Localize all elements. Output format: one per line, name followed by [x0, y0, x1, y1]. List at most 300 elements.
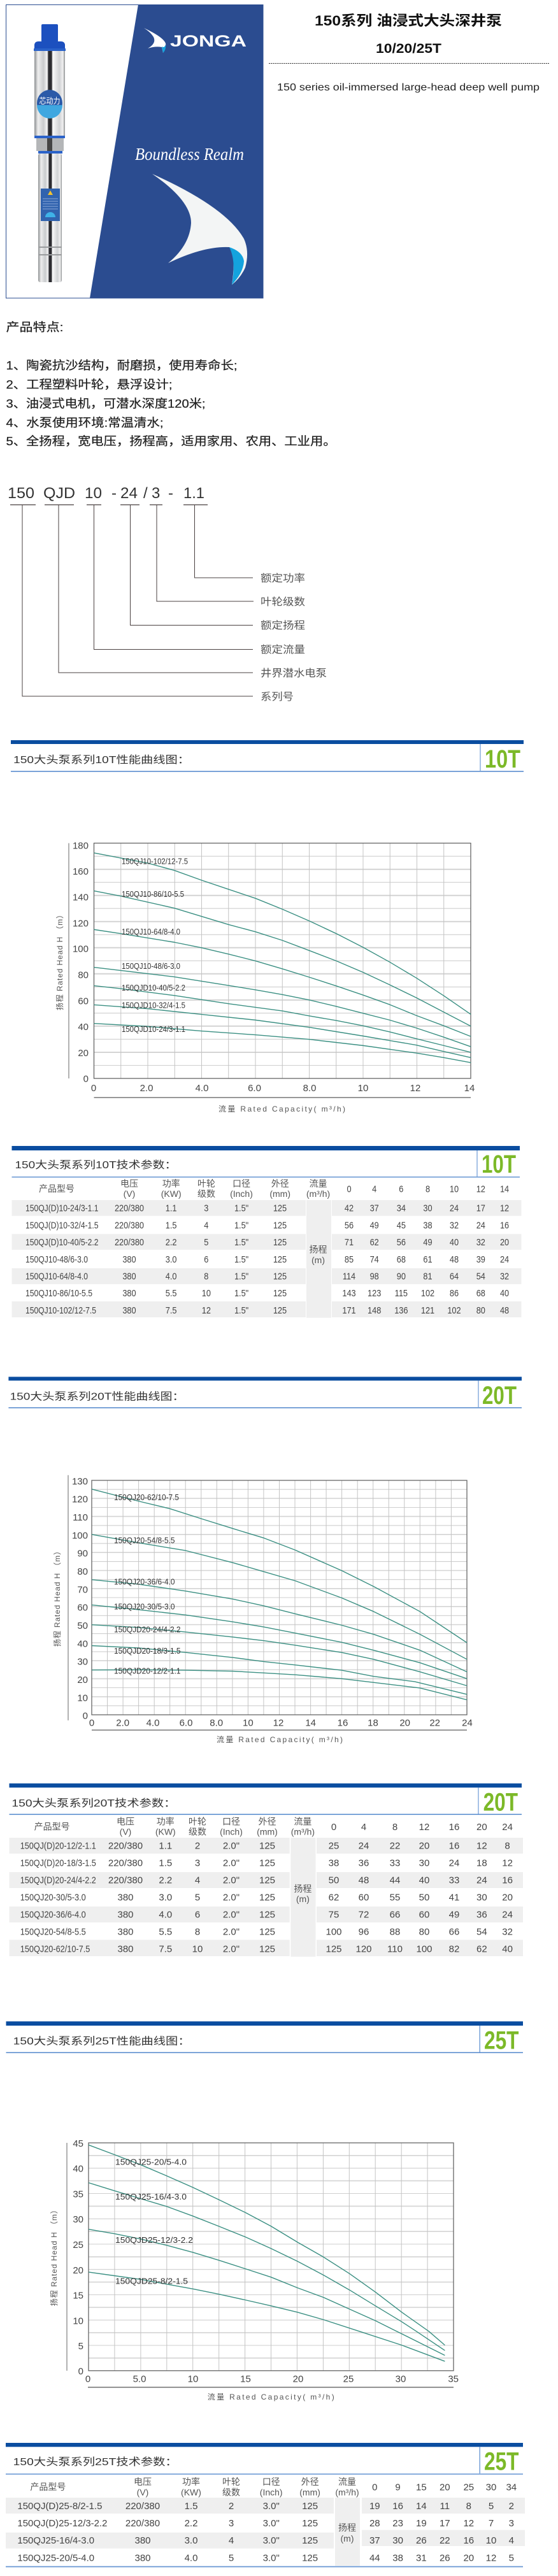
table values: 8 [426, 1183, 430, 1194]
table values: 2.2 [159, 1875, 172, 1885]
table header: 产品型号 [30, 2482, 66, 2492]
table values: 30 [486, 2482, 496, 2493]
table values: 380 [117, 1926, 134, 1938]
table header: 电压 [117, 1817, 134, 1827]
curve labels: 150QJD10-32/4-1.5 [122, 1001, 185, 1010]
panel: product banner [6, 4, 263, 298]
table values: 14 [416, 2501, 427, 2512]
table values: 72 [359, 1910, 369, 1920]
table values: 16 [463, 2535, 474, 2546]
chart: 10T performance curves [55, 841, 475, 1113]
model code: 150 [8, 485, 34, 502]
text block: product features: 产品特点: [6, 320, 64, 334]
chart: 25T performance curves [49, 2138, 459, 2401]
curve labels: 150QJ10-64/8-4.0 [122, 927, 180, 936]
table values: 15 [416, 2482, 427, 2493]
table values: 125 [273, 1305, 287, 1315]
table header: 外径 [301, 2477, 319, 2487]
table values: 80 [419, 1926, 429, 1938]
table values: 12 [463, 2518, 474, 2529]
section header: 20T curve: 20T [482, 1382, 517, 1410]
section header: 10T curve: 10T [485, 745, 520, 773]
x axis labels: 4.0 [147, 1717, 159, 1729]
table header: 扬程 [310, 1245, 327, 1255]
table values: 24 [476, 1875, 487, 1885]
table values: 30 [419, 1857, 429, 1869]
table values: 28 [369, 2518, 380, 2529]
y axis labels: 50 [77, 1621, 88, 1631]
chart: 20T performance curves [52, 1475, 473, 1744]
table values: 24 [502, 1822, 513, 1833]
table values: 66 [449, 1926, 459, 1938]
table values: 0 [347, 1183, 352, 1194]
table values: 102 [447, 1305, 461, 1315]
slogan: Boundless Realm [135, 145, 244, 164]
table values: 2.0" [223, 1892, 240, 1903]
y axis labels: 0 [78, 2366, 83, 2377]
table values: 60 [419, 1910, 429, 1920]
model names: 150QJ(D)25-12/3-2.2 [17, 2518, 107, 2529]
y axis labels: 45 [73, 2138, 83, 2149]
table values: 220/380 [115, 1202, 144, 1213]
table values: 56 [345, 1219, 354, 1231]
table values: 96 [359, 1926, 369, 1938]
table header: (m³/h) [335, 2487, 359, 2497]
model names: 150QJ10-48/6-3.0 [25, 1254, 88, 1265]
table values: 1.5 [166, 1219, 177, 1231]
table values: 45 [397, 1219, 406, 1231]
table values: 88 [390, 1926, 400, 1938]
table values: 20 [463, 2553, 474, 2563]
table values: 5 [489, 2501, 494, 2512]
logo: JONGA: JONGA [170, 32, 247, 50]
text block: product features: 3、油浸式电机，可潜水深度120米; [6, 397, 205, 410]
y axis labels: 120 [72, 1494, 88, 1505]
table values: 102 [421, 1287, 434, 1298]
table values: 1.5" [234, 1236, 248, 1247]
y axis labels: 40 [77, 1638, 88, 1649]
model names: 150QJ(D)10-24/3-1.1 [25, 1203, 98, 1214]
table values: 380 [117, 1892, 134, 1903]
table values: 41 [449, 1892, 459, 1903]
model code: QJD [43, 485, 75, 502]
x axis labels: 2.0 [140, 1083, 153, 1094]
table header: (Inch) [220, 1827, 243, 1837]
model code: 1.1 [183, 485, 204, 502]
table values: 380 [117, 1910, 134, 1920]
legend labels: 系列号 [261, 691, 294, 703]
table values: 3.0 [159, 1892, 172, 1903]
table values: 7 [489, 2518, 494, 2529]
table values: 68 [397, 1254, 406, 1264]
y axis labels: 80 [78, 970, 89, 981]
table values [115, 1183, 509, 1315]
table values: 10 [192, 1944, 203, 1954]
table header: (m³/h) [291, 1827, 315, 1837]
table values: 380 [134, 2535, 151, 2546]
table header: (KW) [181, 2487, 201, 2497]
section header: 10T parameters: 10T [482, 1150, 516, 1178]
table values: 16 [449, 1822, 459, 1833]
y axis labels: 140 [73, 892, 89, 903]
table values: 5.5 [166, 1287, 177, 1298]
model code: 3 [152, 485, 160, 502]
table header: 口径 [222, 1817, 240, 1827]
curve labels: 150QJD10-40/5-2.2 [122, 984, 185, 992]
table values: 32 [502, 1926, 513, 1938]
table values: 20 [476, 1822, 487, 1833]
table values: 11 [440, 2501, 450, 2512]
table values: 50 [329, 1875, 339, 1885]
table values: 4.0 [166, 1270, 177, 1282]
table values: 20 [440, 2482, 450, 2493]
table values: 125 [273, 1254, 287, 1264]
table values: 17 [440, 2518, 450, 2529]
text block: product features: 4、水泵使用环境:常温清水; [6, 416, 163, 429]
section header: 10T parameters [11, 1146, 520, 1178]
table header: 级数 [189, 1827, 206, 1837]
icon: submersible pump [34, 24, 66, 282]
table values: 2 [509, 2501, 514, 2512]
table header: 电压 [134, 2477, 152, 2487]
table values: 22 [390, 1841, 400, 1851]
table values: 24 [502, 1910, 513, 1920]
y axis labels: 80 [77, 1566, 88, 1577]
table values: 25 [463, 2482, 474, 2493]
y axis labels: 0 [83, 1711, 88, 1722]
x axis labels: 0 [89, 1717, 94, 1729]
table header: 级数 [222, 2487, 240, 2497]
table values: 125 [259, 1857, 275, 1869]
table values: 125 [302, 2535, 318, 2546]
section header: 25T parameters: 25T [484, 2447, 519, 2475]
table header: 口径 [232, 1178, 250, 1189]
table values: 220/380 [115, 1219, 144, 1231]
title: 150系列 油浸式大头深井泵 [315, 13, 502, 29]
x axis labels: 24 [462, 1717, 473, 1729]
section header: 25T curve: 25T [484, 2027, 519, 2055]
table values: 380 [122, 1254, 136, 1264]
table header: 外径 [271, 1178, 289, 1189]
model names: 150QJ25-20/5-4.0 [17, 2553, 94, 2563]
table values: 19 [369, 2501, 380, 2512]
legend labels: 额定功率 [261, 573, 305, 584]
table values: 30 [476, 1892, 487, 1903]
table values: 12 [476, 1841, 487, 1851]
x axis title: 流量 Rated Capacity( m³/h) [208, 2393, 334, 2401]
table header: 功率 [162, 1178, 180, 1189]
y axis labels: 110 [73, 1512, 88, 1523]
table values: 125 [259, 1875, 275, 1885]
curve labels: 150QJD25-8/2-1.5 [115, 2277, 188, 2286]
y axis labels: 30 [73, 2214, 83, 2225]
table header: (m) [311, 1255, 325, 1265]
model names: 150QJ25-16/4-3.0 [17, 2535, 94, 2546]
x axis labels: 8.0 [210, 1717, 223, 1729]
legend labels: 额定流量 [261, 644, 305, 655]
table values: 8 [204, 1270, 209, 1282]
table values: 86 [450, 1287, 459, 1298]
table values: 36 [476, 1910, 487, 1920]
table values: 1.5" [234, 1270, 248, 1282]
table values: 20 [500, 1236, 509, 1247]
table values: 9 [395, 2482, 401, 2493]
table header: 产品型号 [39, 1184, 75, 1194]
table header: 外径 [259, 1817, 276, 1827]
y axis labels: 70 [77, 1584, 88, 1595]
table values: 220/380 [125, 2518, 160, 2529]
table values: 68 [476, 1287, 485, 1298]
x axis labels: 0 [85, 2373, 90, 2385]
table values: 66 [390, 1910, 400, 1920]
model names [20, 1841, 96, 1954]
table values: 55 [390, 1892, 400, 1903]
x axis labels: 25 [343, 2373, 354, 2385]
table values: 12 [486, 2553, 496, 2563]
model names: 150QJ(D)10-32/4-1.5 [25, 1220, 98, 1231]
table values: 4 [372, 1183, 376, 1194]
table values: 4 [229, 2535, 234, 2546]
y axis labels [72, 1476, 88, 1722]
curve labels: 150QJ25-20/5-4.0 [115, 2158, 187, 2167]
table values: 82 [449, 1944, 459, 1954]
x axis labels: 0 [91, 1083, 96, 1094]
table values: 1.1 [166, 1202, 177, 1213]
table values: 380 [122, 1305, 136, 1315]
curve labels: 150QJD10-24/3-1.1 [122, 1025, 185, 1034]
table header: (KW) [155, 1827, 176, 1837]
table values: 5 [195, 1892, 200, 1903]
model names: 150QJ10-86/10-5.5 [25, 1288, 92, 1299]
x axis labels: 2.0 [116, 1717, 129, 1729]
x axis labels: 6.0 [180, 1717, 192, 1729]
curve labels: 150QJ10-102/12-7.5 [122, 857, 188, 866]
table values: 1.5" [234, 1219, 248, 1231]
table values: 4 [361, 1822, 366, 1833]
section header: 20T curve [8, 1377, 522, 1410]
table header: (V) [120, 1827, 131, 1837]
curve labels: 150QJD20-24/4-2.2 [114, 1626, 181, 1635]
curve labels: 150QJ10-86/10-5.5 [122, 890, 184, 899]
table header: 扬程 [294, 1884, 311, 1894]
table values: 16 [392, 2501, 403, 2512]
table values: 125 [259, 1841, 275, 1851]
y axis labels [73, 841, 89, 1084]
table values: 8 [392, 1822, 397, 1833]
table values: 125 [302, 2553, 318, 2563]
table values: 30 [392, 2535, 403, 2546]
table values: 31 [416, 2553, 427, 2563]
table values: 220/380 [108, 1857, 143, 1869]
table values [108, 1822, 513, 1954]
table values: 7.5 [166, 1305, 177, 1315]
table values: 71 [345, 1236, 354, 1247]
table values: 100 [326, 1926, 342, 1938]
table header: 流量 [310, 1178, 327, 1189]
table: 20T parameters [9, 1817, 523, 1957]
table values: 23 [392, 2518, 403, 2529]
section header: 10T parameters: 150大头泵系列10T技术参数： [15, 1159, 177, 1171]
table values: 6 [204, 1254, 209, 1264]
x axis labels: 22 [429, 1717, 440, 1729]
table values: 125 [273, 1287, 287, 1298]
table header: 叶轮 [222, 2477, 240, 2487]
table values: 125 [273, 1270, 287, 1282]
x axis labels: 10 [358, 1083, 368, 1094]
table values: 120 [355, 1944, 372, 1954]
y axis labels: 0 [83, 1074, 89, 1084]
table values: 4 [195, 1875, 200, 1885]
table values: 6 [195, 1910, 200, 1920]
table header: 电压 [120, 1178, 138, 1189]
table header: 产品型号 [34, 1822, 70, 1832]
table values: 98 [370, 1270, 379, 1282]
table values: 12 [419, 1822, 429, 1833]
table values: 4.0 [185, 2553, 197, 2563]
table values: 125 [259, 1944, 275, 1954]
table values: 22 [440, 2535, 450, 2546]
table values: 37 [370, 1202, 379, 1213]
y axis labels: 25 [73, 2240, 83, 2250]
table values: 10 [486, 2535, 496, 2546]
model code [8, 485, 204, 502]
y axis labels: 100 [73, 944, 89, 954]
text block: product features: 5、全扬程，宽电压，扬程高，适用家用、农用、工业用。 [6, 434, 336, 448]
table values [125, 2482, 517, 2563]
table values: 16 [500, 1219, 509, 1231]
text block: product features: 1、陶瓷抗沙结构，耐磨损，使用寿命长; [6, 359, 237, 372]
diagram: model number legend [8, 485, 327, 703]
table values: 25 [329, 1841, 339, 1851]
table values: 1.5 [159, 1857, 172, 1869]
table values: 18 [476, 1857, 487, 1869]
table values: 125 [259, 1910, 275, 1920]
table values: 24 [476, 1219, 485, 1231]
table values: 125 [302, 2501, 318, 2512]
table values: 5 [509, 2553, 514, 2563]
table values: 62 [329, 1892, 339, 1903]
table values: 54 [476, 1270, 485, 1282]
table values: 34 [397, 1202, 406, 1213]
legend labels: 额定扬程 [261, 620, 305, 631]
x axis title: 流量 Rated Capacity( m³/h) [218, 1105, 345, 1113]
table values: 24 [359, 1841, 369, 1851]
table values: 100 [416, 1944, 433, 1954]
x axis labels: 5.0 [133, 2373, 146, 2385]
table header: 叶轮 [197, 1178, 215, 1189]
table values: 30 [423, 1202, 433, 1213]
table header: 级数 [197, 1189, 215, 1199]
table values: 125 [273, 1219, 287, 1231]
table values: 3.0" [263, 2501, 280, 2512]
y axis labels: 60 [78, 996, 89, 1006]
curves [89, 2145, 445, 2361]
table values: 110 [387, 1944, 403, 1954]
model names: 150QJ(D)20-24/4-2.2 [20, 1875, 96, 1885]
table values: 123 [368, 1287, 382, 1298]
table values: 4 [204, 1219, 209, 1231]
curve labels: 150QJ20-54/8-5.5 [114, 1536, 175, 1545]
table values: 2.0" [223, 1926, 240, 1938]
table values: 40 [500, 1287, 509, 1298]
table values: 20 [502, 1892, 513, 1903]
table values: 16 [502, 1875, 513, 1885]
text block: product features [6, 320, 336, 448]
table values: 32 [500, 1270, 509, 1282]
table values: 26 [416, 2535, 427, 2546]
x axis labels: 16 [338, 1717, 348, 1729]
section header: 25T curve [6, 2021, 523, 2055]
table values: 2.2 [166, 1236, 177, 1247]
table values: 3.0 [185, 2535, 197, 2546]
table values: 4.0 [159, 1910, 172, 1920]
table values: 121 [421, 1305, 434, 1315]
y axis labels: 120 [73, 919, 89, 929]
table values: 2.0" [223, 1910, 240, 1920]
table values: 49 [449, 1910, 459, 1920]
section header: 20T parameters: 20T [483, 1789, 518, 1817]
table values: 380 [122, 1270, 136, 1282]
table values: 3 [204, 1202, 209, 1213]
table values: 380 [122, 1287, 136, 1298]
x axis labels: 20 [399, 1717, 410, 1729]
table values: 125 [302, 2518, 318, 2529]
table values: 2.0" [223, 1841, 240, 1851]
table: 25T parameters [6, 2477, 525, 2567]
table values: 62 [370, 1236, 379, 1247]
y axis labels: 20 [73, 2265, 83, 2276]
table values: 1.5" [234, 1202, 248, 1213]
x axis labels [89, 1717, 473, 1729]
table values: 115 [395, 1287, 408, 1298]
curve labels: 150QJD20-18/3-1.5 [114, 1647, 181, 1656]
table values: 19 [416, 2518, 427, 2529]
table values: 8 [195, 1926, 200, 1938]
y axis labels: 10 [77, 1692, 88, 1703]
model names [25, 1203, 98, 1316]
table values: 12 [202, 1305, 211, 1315]
table values: 80 [476, 1305, 485, 1315]
table header: 功率 [157, 1817, 175, 1827]
table values: 32 [476, 1236, 485, 1247]
table header [39, 1178, 330, 1265]
logo: JONGA [144, 28, 247, 53]
section header: 10T curve [11, 740, 524, 773]
table values: 220/380 [115, 1236, 144, 1247]
table values: 1.5 [185, 2501, 197, 2512]
table header: (V) [137, 2487, 148, 2497]
x axis labels: 20 [293, 2373, 303, 2385]
y axis labels: 10 [73, 2315, 83, 2326]
table values: 26 [440, 2553, 450, 2563]
model code: - [168, 485, 173, 502]
y axis labels: 90 [77, 1549, 88, 1559]
table values: 3.0" [263, 2535, 280, 2546]
table values: 143 [342, 1287, 356, 1298]
table values: 16 [449, 1841, 459, 1851]
table values: 220/380 [108, 1841, 143, 1851]
table header: (m) [296, 1894, 310, 1904]
table values: 14 [500, 1183, 509, 1194]
table values: 42 [345, 1202, 354, 1213]
table values: 64 [450, 1270, 459, 1282]
table header: (KW) [161, 1189, 182, 1199]
table: 10T parameters [11, 1178, 521, 1318]
table values: 49 [370, 1219, 379, 1231]
table values: 56 [397, 1236, 406, 1247]
y axis labels [73, 2138, 83, 2377]
section header: 10T curve: 150大头泵系列10T性能曲线图： [13, 754, 190, 766]
